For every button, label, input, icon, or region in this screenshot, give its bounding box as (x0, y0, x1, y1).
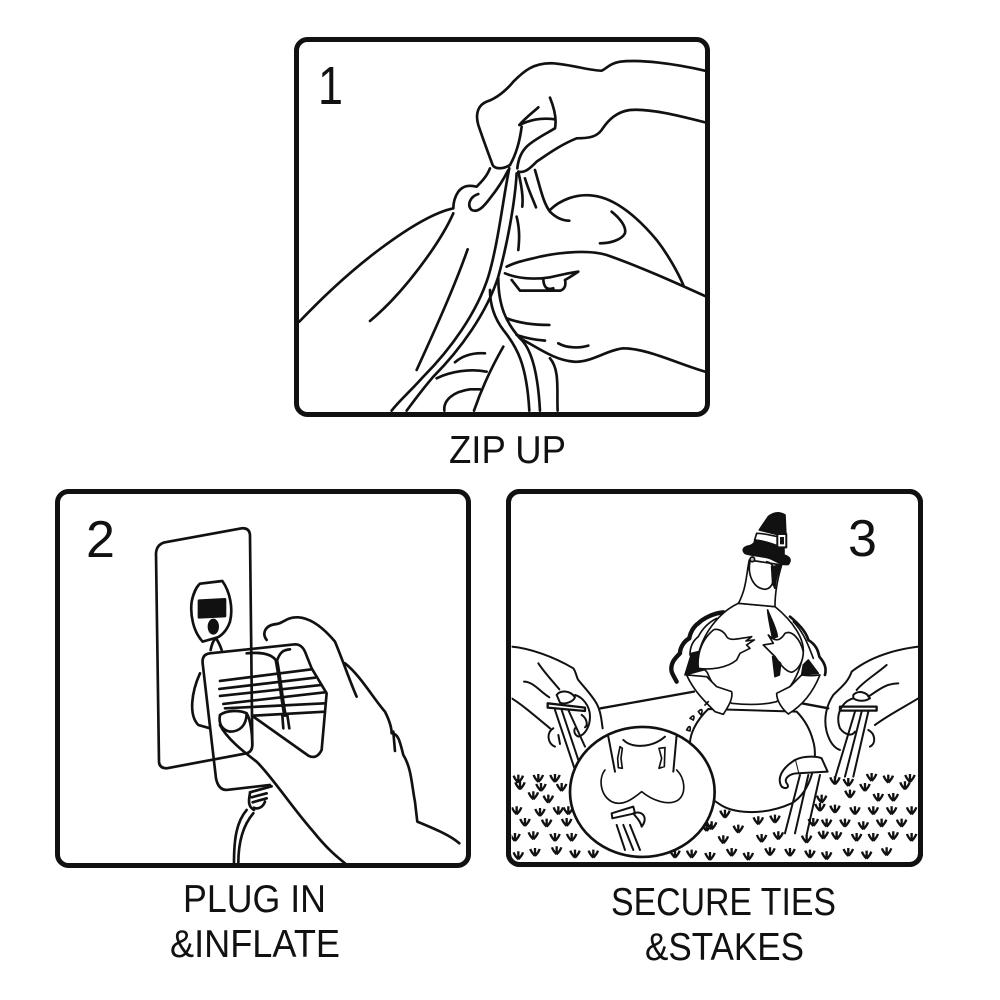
illustration: hands zipping fabric (299, 61, 705, 411)
legs (687, 675, 732, 714)
magnifier detail (570, 727, 715, 857)
pilgrim hat (743, 513, 790, 565)
illustration: turkey with stakes (510, 513, 918, 860)
lower body (690, 709, 815, 812)
front stake (780, 757, 828, 835)
neck and head (738, 560, 782, 607)
number 2: 2 (86, 511, 115, 569)
caption: secure ties: SECURE TIES (611, 881, 836, 924)
number 1: 1 (318, 56, 343, 116)
wings (698, 629, 754, 669)
frame 3 (508, 492, 920, 864)
caption: inflate: &INFLATE (170, 923, 340, 966)
tail feathers (671, 612, 826, 682)
frame 1 (296, 40, 708, 414)
upper body (697, 603, 803, 704)
panel 3: secure ties and stakes (508, 492, 920, 864)
grass tufts (510, 773, 916, 860)
panel 2: plug in and inflate (58, 492, 468, 866)
illustration: hand plugging pump into outlet (156, 528, 459, 863)
frame 2 (58, 492, 468, 866)
frame top edge for panel 3 (508, 492, 920, 864)
panel 1: zip up (296, 40, 708, 414)
right hand and stake (802, 647, 918, 778)
number 3: 3 (848, 510, 877, 568)
chest seam (768, 610, 781, 677)
caption: plug in: PLUG IN (183, 878, 326, 921)
caption: zip up: ZIP UP (449, 429, 566, 472)
caption: stakes: &STAKES (645, 926, 804, 969)
left hand and stake (512, 647, 694, 770)
tie loops on base (687, 702, 708, 731)
turkey (671, 513, 826, 714)
